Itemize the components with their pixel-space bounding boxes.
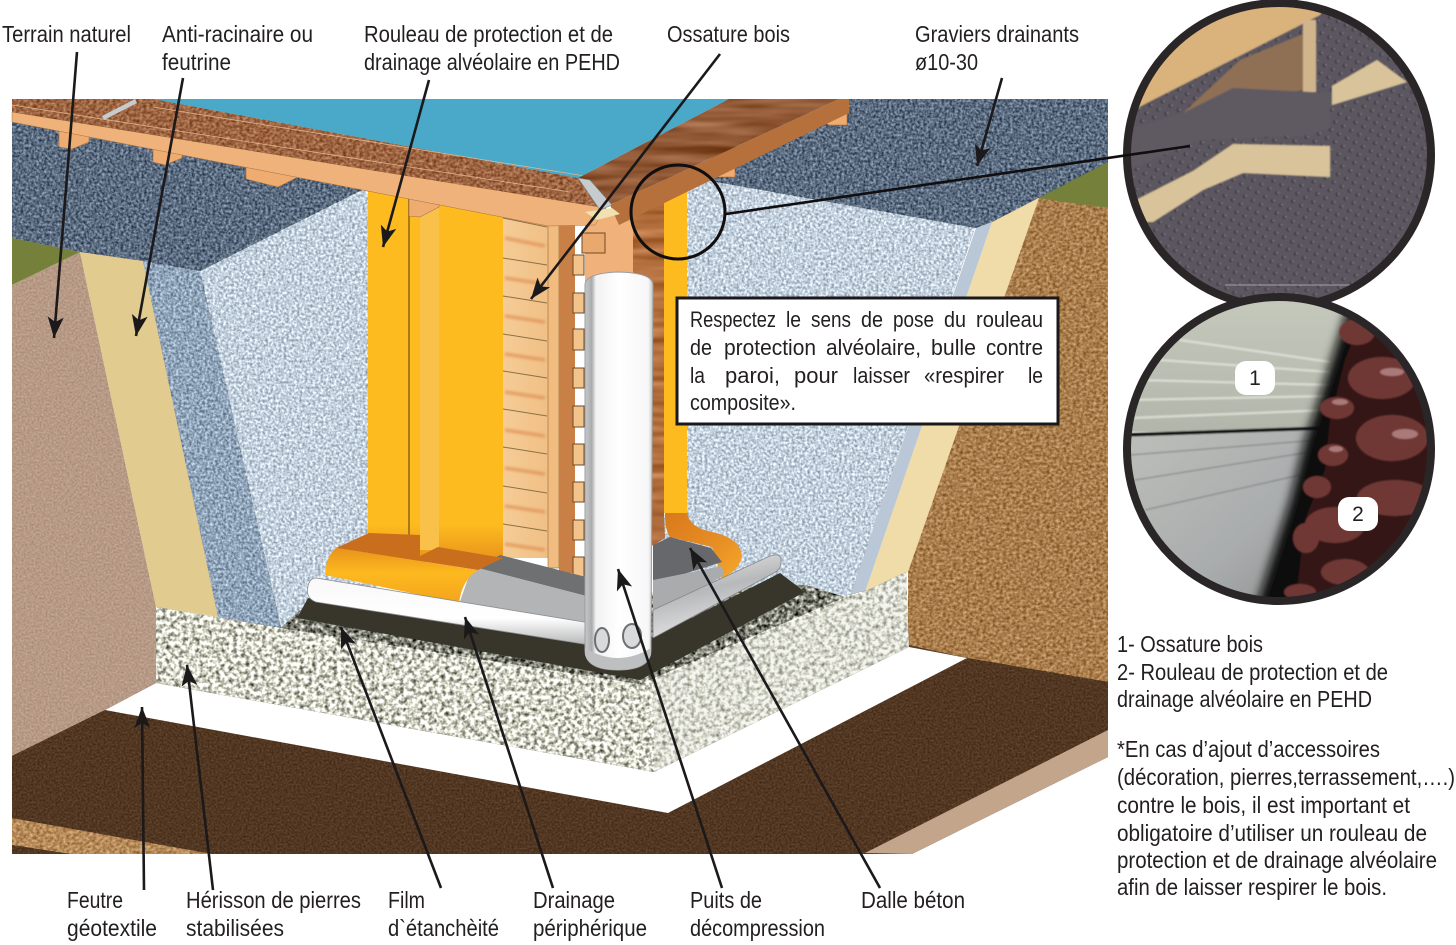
label: film: d`étanchèité	[388, 915, 499, 941]
label: feutre	[67, 887, 157, 941]
corner post	[585, 215, 633, 285]
photo content	[1131, 7, 1427, 298]
natural soil right	[908, 198, 1108, 682]
arrow: drainage	[465, 617, 553, 888]
pipe hole right	[623, 624, 641, 648]
light yellow post	[420, 205, 439, 550]
wood post dark side	[559, 208, 575, 573]
bubble shadow	[1252, 313, 1352, 597]
plank lines	[503, 218, 547, 531]
photo content	[1131, 301, 1427, 597]
label: herisson	[186, 887, 361, 941]
label: rouleau: drainage alvéolaire en PEHD	[364, 49, 620, 75]
white drainage pipe left	[307, 578, 590, 645]
right fascia beam	[610, 99, 849, 225]
label: ossature: Ossature bois	[667, 21, 790, 47]
label: terrain naturel: Terrain naturel	[2, 21, 131, 47]
badge 2 digit: 2	[1352, 503, 1364, 526]
white corner lower right	[912, 757, 1108, 854]
callout text: alvéolaire,	[826, 335, 921, 360]
label: rouleau: Rouleau de protection et de	[364, 21, 613, 47]
dark strap	[1125, 88, 1330, 170]
leader line to photo	[726, 146, 1190, 214]
callout text: pour	[794, 363, 838, 388]
label: anti-racinaire: feutrine	[162, 49, 231, 75]
printed band main	[1130, 144, 1330, 222]
callout box	[677, 298, 1058, 424]
arrow: feutre geotextile	[142, 707, 144, 890]
hanging posts under beam	[59, 100, 847, 217]
badge 1 background	[1235, 361, 1275, 395]
label: film	[388, 887, 499, 941]
callout text: laisser	[853, 363, 910, 388]
photo ring	[1127, 3, 1431, 307]
label: graviers	[915, 21, 1079, 75]
beam shadow	[1183, 34, 1303, 113]
root barrier left	[80, 252, 218, 617]
label: puits: Puits de	[690, 887, 762, 913]
post shadow line	[408, 195, 410, 555]
right wooden deck	[578, 99, 839, 205]
photo ring	[1127, 297, 1431, 601]
stone bed top darker area	[281, 585, 845, 684]
waterproof film	[297, 573, 805, 680]
label: herisson: Hérisson de pierres	[186, 887, 361, 913]
post 5	[712, 147, 735, 177]
label: film: Film	[388, 887, 425, 913]
note text: *En cas d’ajout d’accessoires	[1117, 736, 1380, 762]
grey concrete slab face right	[653, 566, 724, 615]
bubble highlights	[1329, 368, 1418, 452]
wood post light side	[548, 208, 559, 568]
wood beam	[1138, 7, 1322, 109]
callout text: composite».	[690, 390, 796, 415]
pipe bottom shade	[585, 648, 651, 670]
post 6	[806, 100, 847, 125]
drainage gravel face left	[200, 187, 400, 628]
post 1	[59, 120, 89, 149]
green lawn right	[1037, 162, 1108, 208]
arrow: graviers drainants	[977, 78, 1002, 166]
orange membrane floor left	[336, 533, 503, 570]
wood upper board	[1132, 301, 1350, 434]
callout text: pose	[893, 307, 934, 332]
grey concrete slab top right	[653, 537, 722, 580]
wood grain accents	[505, 238, 545, 550]
label: puits	[690, 887, 825, 941]
arrow: film	[341, 627, 441, 888]
dark excavated ground	[12, 640, 1108, 854]
post 2	[153, 138, 182, 165]
gravel top surface right	[688, 99, 1108, 228]
dimpled membrane	[1132, 13, 1427, 298]
grey concrete slab face left	[459, 568, 590, 626]
bubbles	[1284, 319, 1433, 600]
arrow: herisson	[187, 665, 213, 890]
callout text: du	[944, 307, 966, 332]
yellow panel dividers	[408, 195, 439, 555]
stone bed base	[156, 572, 909, 772]
deck plank lines	[12, 105, 585, 192]
label: herisson: stabilisées	[186, 915, 284, 941]
plank surface	[503, 212, 549, 558]
legend text: drainage alvéolaire en PEHD	[1117, 686, 1372, 712]
label: drainage	[533, 887, 647, 941]
wood planks wall	[503, 212, 549, 558]
callout text: contre	[986, 335, 1043, 360]
wood wall right of pipe	[633, 194, 665, 550]
photo detail: drainage roll band on wall	[1120, 0, 1440, 310]
orange membrane right	[665, 513, 742, 578]
label: feutre: géotextile	[67, 915, 157, 941]
badge 2 background	[1338, 497, 1378, 531]
green lawn left	[12, 238, 80, 285]
root barrier right	[865, 198, 1039, 592]
drainage gravel face right	[660, 165, 976, 600]
callout text	[690, 307, 1043, 415]
note text: afin de laisser respirer le bois.	[1117, 874, 1387, 900]
badge 1	[1235, 361, 1275, 395]
printed band right	[1332, 60, 1407, 105]
natural soil left	[12, 252, 156, 756]
badge 1 digit: 1	[1249, 367, 1261, 390]
photo detail: wood and bubble membrane	[1120, 290, 1440, 610]
arrow: rouleau de protection	[383, 80, 429, 247]
callout text: «respirer	[924, 363, 1004, 388]
pipe hole left	[595, 628, 609, 652]
left metal bracket	[103, 101, 136, 118]
ground strip lower left	[12, 818, 213, 854]
blurred photo layers	[1131, 7, 1427, 298]
badge 2	[1338, 497, 1378, 531]
white drainage pipe right	[653, 555, 781, 638]
callout text: sens	[811, 307, 851, 332]
note text	[1117, 736, 1455, 900]
callout text: paroi,	[725, 363, 780, 388]
callout text: de	[861, 307, 883, 332]
label: feutre: Feutre	[67, 887, 123, 913]
left wooden deck	[12, 99, 606, 208]
label: graviers: ø10-30	[915, 49, 978, 75]
label: dalle: Dalle béton	[861, 887, 965, 913]
note text: obligatoire d’utiliser un rouleau de	[1117, 820, 1427, 846]
seam line	[1225, 284, 1350, 286]
legend text	[1117, 631, 1388, 712]
post 4	[409, 184, 439, 217]
arrow: terrain naturel	[54, 52, 77, 338]
label: drainage: Drainage	[533, 887, 615, 913]
callout text: de	[690, 335, 712, 360]
drainage gravel side strip right	[850, 222, 992, 597]
board joint	[1125, 428, 1325, 435]
pipe body	[585, 272, 653, 670]
callout text: le	[786, 307, 801, 332]
label: drainage: périphérique	[533, 915, 647, 941]
label: graviers: Graviers drainants	[915, 21, 1079, 47]
callout text: Respectez	[690, 307, 776, 332]
legend text: 1- Ossature bois	[1117, 631, 1263, 657]
tan ground strip lower right	[865, 730, 1108, 854]
arrow: anti-racinaire	[136, 78, 183, 336]
pool water blue liner	[153, 99, 729, 178]
note text: contre le bois, il est important et	[1117, 792, 1411, 818]
stone bed right face highlight	[654, 572, 909, 772]
tenon teeth	[573, 233, 605, 577]
gravel top surface left	[12, 120, 368, 271]
post 3	[246, 154, 300, 187]
grey concrete slab top left	[478, 555, 590, 597]
brown membrane mass	[1297, 336, 1427, 592]
orange membrane curl left	[325, 548, 478, 603]
geotextile white felt	[105, 647, 967, 813]
yellow protection roll left	[368, 190, 503, 562]
label: puits: décompression	[690, 915, 825, 941]
callout text: la	[690, 363, 706, 388]
callout text: rouleau	[976, 307, 1043, 332]
label: anti-racinaire	[162, 21, 313, 75]
detail circle marker	[631, 165, 725, 259]
callout text: le	[1028, 363, 1043, 388]
lower board grain	[1130, 440, 1320, 510]
yellow protection roll right	[664, 177, 687, 513]
legend text: 2- Rouleau de protection et de	[1117, 659, 1388, 685]
left fascia beam	[12, 112, 606, 226]
corner cream joint	[585, 208, 620, 220]
wood lower board	[1131, 430, 1318, 596]
callout frame	[677, 298, 1058, 424]
decompression well pipe	[585, 272, 653, 670]
wood upright	[1303, 20, 1316, 92]
callout text: protection	[724, 335, 816, 360]
label: rouleau	[364, 21, 620, 75]
arrow: dalle	[690, 548, 880, 888]
drainage gravel side strip left	[143, 261, 281, 628]
label: anti-racinaire: Anti-racinaire ou	[162, 21, 313, 47]
callout text: bulle	[931, 335, 976, 360]
arrow: ossature bois	[531, 54, 720, 299]
arrow: puits	[618, 569, 722, 888]
diagram: pool installation cross-section	[12, 99, 1108, 854]
corner metal bracket	[578, 178, 612, 210]
wood grain	[1130, 340, 1330, 418]
blurred photo layers	[1131, 301, 1427, 597]
